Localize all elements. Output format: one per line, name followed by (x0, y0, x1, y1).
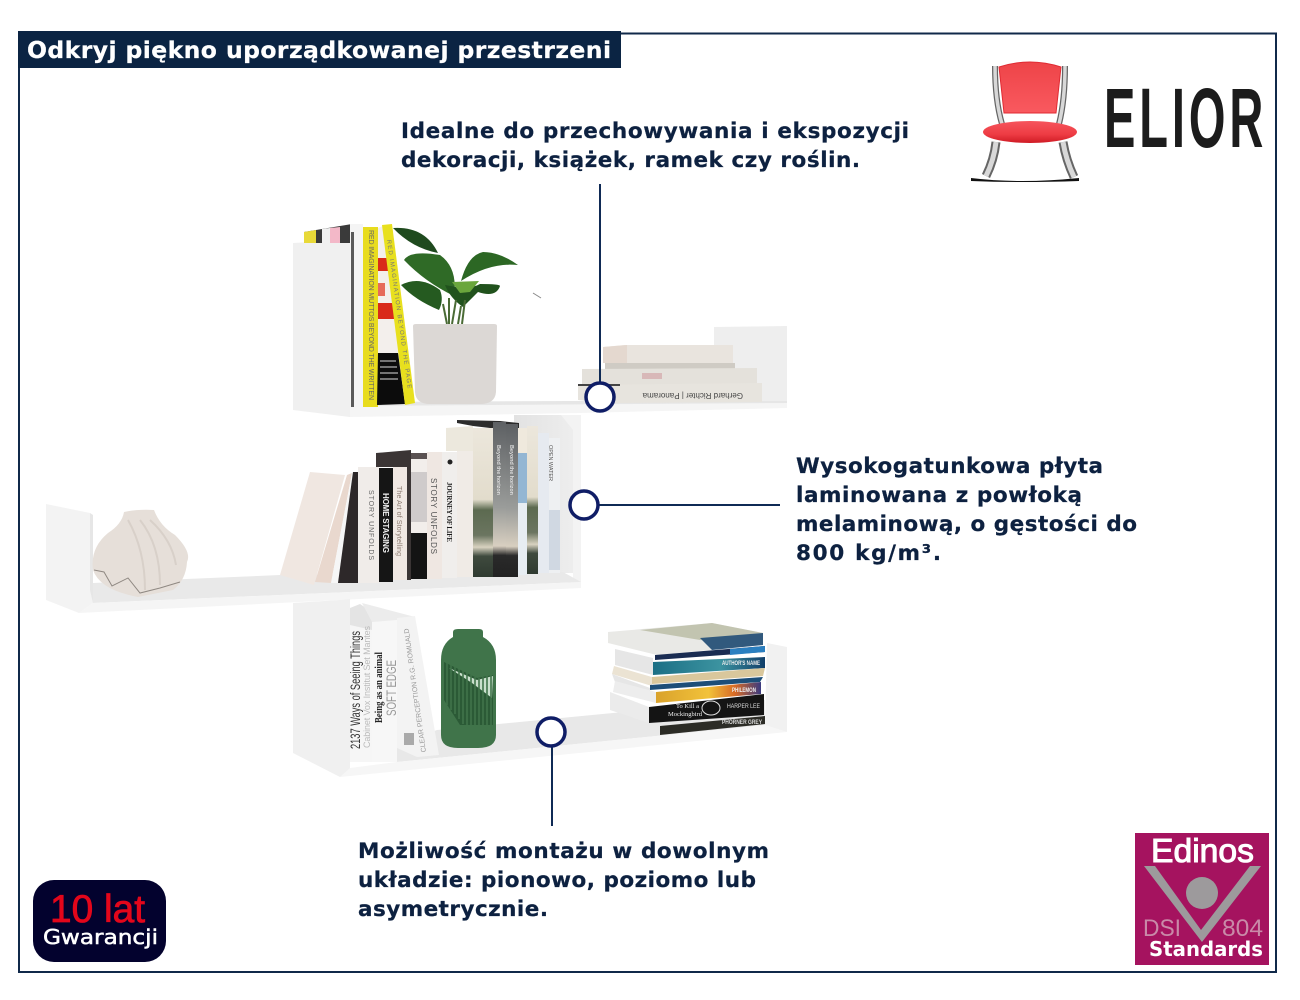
badge: 10 year warranty (33, 880, 166, 962)
bottom shelf left books: Cabinet Vox Institut Set Mantes (362, 626, 372, 748)
middle shelf books: STORY UNFOLDS (429, 478, 438, 554)
middle shelf books: JOURNEY OF LIFE (445, 482, 453, 542)
bottom shelf left books: CLEAR PERCEPTION R.G. ROMUALD (404, 628, 428, 753)
right book stack: AUTHOR'S NAME (722, 660, 760, 667)
badge: 10 year warranty: Gwarancji (43, 925, 158, 949)
right book stack: To Kill a (676, 703, 699, 710)
top shelf items: magazine and books: RED IMAGINATION MUTTOS BEYOND THE WRITTEN (367, 230, 374, 400)
middle shelf books: Beyond the horizon (495, 445, 501, 496)
bottom shelf left books (347, 603, 439, 762)
middle shelf (46, 415, 581, 613)
right book stack: Gerhard Richter | Panorama (642, 391, 743, 400)
bottom shelf left books: Being as an animal (373, 652, 385, 723)
title banner: Odkryj piękno uporządkowanej przestrzeni (27, 36, 611, 64)
middle shelf books: The Art of Storytelling (395, 486, 402, 556)
callout text: mounting: asymetrycznie. (358, 897, 548, 922)
right book stack (578, 345, 762, 403)
bottom shelf left books: 2137 Ways of Seeing Things (347, 631, 363, 749)
top shelf items: magazine and books: RED IMAGINATION BEYOND THE PAGE (385, 239, 412, 389)
vase (93, 510, 188, 597)
badge: Edinos standards: Standards (1149, 937, 1263, 961)
ELIOR wordmark: ELIOR (1104, 72, 1267, 166)
logo: ELIOR chair (971, 62, 1267, 182)
bottom shelf left books: SOFT EDGE (383, 660, 399, 716)
right book stack: Mockingbird (668, 711, 703, 718)
callout marker: bottom shelf line and circle (537, 718, 565, 826)
green vase (441, 629, 496, 748)
right book stack: PHORNER GREY (722, 719, 763, 726)
top shelf items: magazine and books (304, 224, 415, 407)
badge: Edinos standards: 804 (1222, 915, 1263, 942)
right book stack: PHILEMON (732, 688, 756, 694)
callout marker: top shelf line and circle (586, 184, 614, 411)
bottom shelf (293, 599, 787, 777)
callout text: material: melaminową, o gęstości do (796, 512, 1137, 537)
badge: Edinos standards: DSI (1143, 915, 1181, 942)
right book stack (608, 623, 765, 735)
callout text: storage and display: Idealne do przechowywania i ekspozycji (401, 119, 909, 144)
callout text: material: Wysokogatunkowa płyta (796, 454, 1103, 479)
callout text: material: laminowana z powłoką (796, 483, 1082, 508)
middle shelf books: OPEN WATER (547, 445, 553, 481)
badge: 10 year warranty: 10 lat (50, 888, 145, 931)
panel: shelf unit (46, 224, 787, 777)
middle shelf books: Beyond the horizon (508, 445, 514, 496)
callout text: storage and display: dekoracji, książek, ramek czy roślin. (401, 148, 860, 173)
middle shelf books: STORY UNFOLDS (367, 490, 374, 560)
plant in pot (393, 228, 541, 404)
callout text: material: 800 kg/m³. (796, 541, 941, 566)
callout marker: middle shelf line and circle (570, 491, 780, 519)
middle shelf books (280, 420, 560, 585)
callout text: mounting: Możliwość montażu w dowolnym (358, 839, 769, 864)
top shelf (293, 224, 787, 417)
callout text: mounting: układzie: pionowo, poziomo lub (358, 868, 756, 893)
chair icon (971, 62, 1079, 182)
right book stack: HARPER LEE (727, 703, 761, 710)
middle shelf books: HOME STAGING (381, 493, 390, 553)
badge: Edinos standards: Edinos (1151, 832, 1254, 869)
badge: Edinos standards (1135, 832, 1269, 965)
